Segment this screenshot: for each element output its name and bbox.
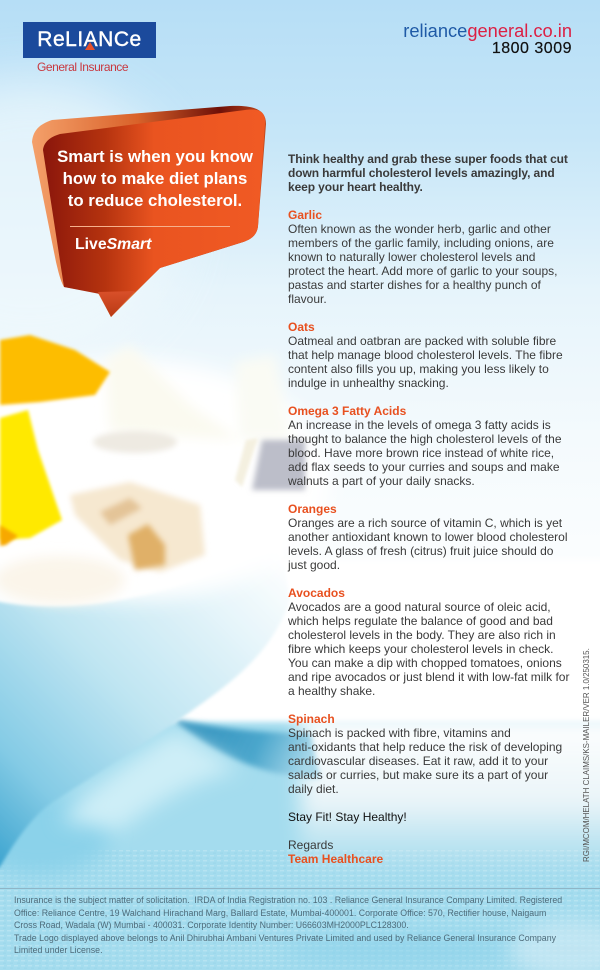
section: Oranges: just good. xyxy=(288,558,340,572)
pale strip beside bowl edge xyxy=(60,730,240,830)
section: Omega 3 Fatty Acids: thought to balance the high cholesterol levels of the xyxy=(288,432,562,446)
section: Oats: Oatmeal and oatbran are packed with soluble fibre xyxy=(288,334,556,348)
footer disclaimer xyxy=(14,895,562,955)
section: Garlic xyxy=(288,208,557,306)
bubble headline: to reduce cholesterol. xyxy=(68,191,242,210)
vertical reference code: RGI/MCOM/HELATH CLAIMS/KS-MAILER/VER 1.0/250315. xyxy=(582,648,591,862)
section: Avocados: Avocados are a good natural source of oleic acid, xyxy=(288,600,551,614)
section: Omega 3 Fatty Acids: walnuts a part of your daily snacks. xyxy=(288,474,475,488)
bubble divider xyxy=(70,226,230,227)
section: Garlic: flavour. xyxy=(288,292,327,306)
section: Oats: that help manage blood cholesterol levels. The fibre xyxy=(288,348,563,362)
regards: Regards xyxy=(288,838,333,852)
website and phone xyxy=(403,20,572,57)
oats xyxy=(93,431,177,453)
bubble: tail xyxy=(98,291,135,317)
section: Garlic: protect the heart. Add more of garlic to your soups, xyxy=(288,264,557,278)
bubble headline: Smart is when you know xyxy=(57,147,253,166)
cloth xyxy=(0,715,600,970)
logo xyxy=(23,22,156,74)
mango pieces xyxy=(0,335,110,405)
section: Oranges xyxy=(288,502,568,572)
section: Avocados: which helps regulate the balance of good and bad xyxy=(288,614,553,628)
milk xyxy=(0,360,330,600)
section: Omega 3 Fatty Acids: add flax seeds to your curries and soups and make xyxy=(288,460,560,474)
section: Spinach: anti-oxidants that help reduce the risk of developing xyxy=(288,740,562,754)
section: Omega 3 Fatty Acids xyxy=(288,404,562,488)
section: Garlic: members of the garlic family, including onions, are xyxy=(288,236,554,250)
section: Omega 3 Fatty Acids: Omega 3 Fatty Acids xyxy=(288,404,406,418)
section: Garlic: known to naturally lower cholesterol levels and xyxy=(288,250,535,264)
footer disclaimer: Insurance is the subject matter of solicitation. IRDA of India Registration no. 103 . Reliance General Insurance Company Limited. Registered xyxy=(14,895,562,905)
intro text xyxy=(288,152,568,194)
bubble: front face xyxy=(43,110,265,294)
footer disclaimer: Limited under License. xyxy=(14,945,103,955)
pale fade on right side of the cloth xyxy=(300,715,600,875)
section: Spinach: Spinach is packed with fibre, vitamins and xyxy=(288,726,511,740)
intro text: down harmful cholesterol levels amazingly, and xyxy=(288,166,555,180)
pale glow on the left of the sky xyxy=(0,80,180,360)
section: Spinach: salads or curries, but make sure its a part of your xyxy=(288,768,548,782)
section: Omega 3 Fatty Acids: An increase in the levels of omega 3 fatty acids is xyxy=(288,418,551,432)
section: Avocados: Avocados xyxy=(288,586,345,600)
section: Avocados: cholesterol levels in the body. They are also rich in xyxy=(288,628,556,642)
bubble headline: how to make diet plans xyxy=(63,169,247,188)
section: Oranges: another antioxidant known to lower blood cholesterol xyxy=(288,530,568,544)
bubble: extruded edge xyxy=(32,106,266,317)
sign-off line: Stay Fit! Stay Healthy! xyxy=(288,810,407,824)
footer disclaimer: Trade Logo displayed above belongs to Anil Dhirubhai Ambani Ventures Private Limited and used by Reliance General Insurance Company xyxy=(14,932,556,942)
logo: red triangle xyxy=(85,42,95,50)
section: Garlic: pastas and starter dishes for a healthy punch of xyxy=(288,278,541,292)
website and phone: reliancegeneral.co.in xyxy=(403,20,572,41)
regards xyxy=(288,838,383,866)
intro text: Think healthy and grab these super foods that cut xyxy=(288,152,568,166)
section: Avocados: fibre which keeps your cholesterol levels in check. xyxy=(288,642,553,656)
intro text: keep your heart healthy. xyxy=(288,180,423,194)
section: Oranges: Oranges xyxy=(288,502,337,516)
footer disclaimer: Cross Road, Wadala (W) Mumbai - 400031. Corporate Identity Number: U66603MH2000PLC128300. xyxy=(14,920,409,930)
spoon xyxy=(252,440,305,490)
section: Spinach: Spinach xyxy=(288,712,335,726)
logo: blue box: ReLIANCe xyxy=(37,28,142,51)
white area above the cloth xyxy=(170,560,600,722)
section: Spinach xyxy=(288,712,562,796)
section: Oranges: Oranges are a rich source of vitamin C, which is yet xyxy=(288,516,562,530)
section: Avocados: You can make a dip with chopped tomatoes, onions xyxy=(288,656,562,670)
section: Oats xyxy=(288,320,563,390)
crescent shadow under the bowl xyxy=(176,720,320,778)
footer rule xyxy=(0,888,600,889)
section: Spinach: daily diet. xyxy=(288,782,339,796)
website and phone: 1800 3009 xyxy=(492,40,572,57)
section: Oranges: levels. A glass of fresh (citrus) fruit juice should do xyxy=(288,544,553,558)
speech bubble xyxy=(32,106,266,317)
section: Oats: Oats xyxy=(288,320,315,334)
logo: blue box xyxy=(23,22,156,58)
bowl xyxy=(0,540,290,872)
section: Oats: indulge in unhealthy snacking. xyxy=(288,376,449,390)
footer disclaimer: Office: Reliance Centre, 19 Walchand Hirachand Marg, Ballard Estate, Mumbai-400001. Corporate Office: 570, Rectifier house, Naigaum xyxy=(14,908,546,918)
section: Garlic: Garlic xyxy=(288,208,322,222)
bubble headline xyxy=(57,147,253,210)
section: Oats: content also fills you up, making you less likely to xyxy=(288,362,549,376)
section: Avocados: a healthy shake. xyxy=(288,684,375,698)
logo: tagline: General Insurance xyxy=(37,60,128,74)
section: Garlic: Often known as the wonder herb, garlic and other xyxy=(288,222,551,236)
section: Avocados: and ripe avocados or just blend it with low-fat milk for xyxy=(288,670,569,684)
section: Omega 3 Fatty Acids: blood. Have more brown rice instead of white rice, xyxy=(288,446,554,460)
regards: Team Healthcare xyxy=(288,852,383,866)
LiveSmart tagline: LiveSmart xyxy=(75,236,151,253)
section: Spinach: cardiovascular diseases. Eat it raw, add it to your xyxy=(288,754,548,768)
section: Avocados xyxy=(288,586,570,698)
